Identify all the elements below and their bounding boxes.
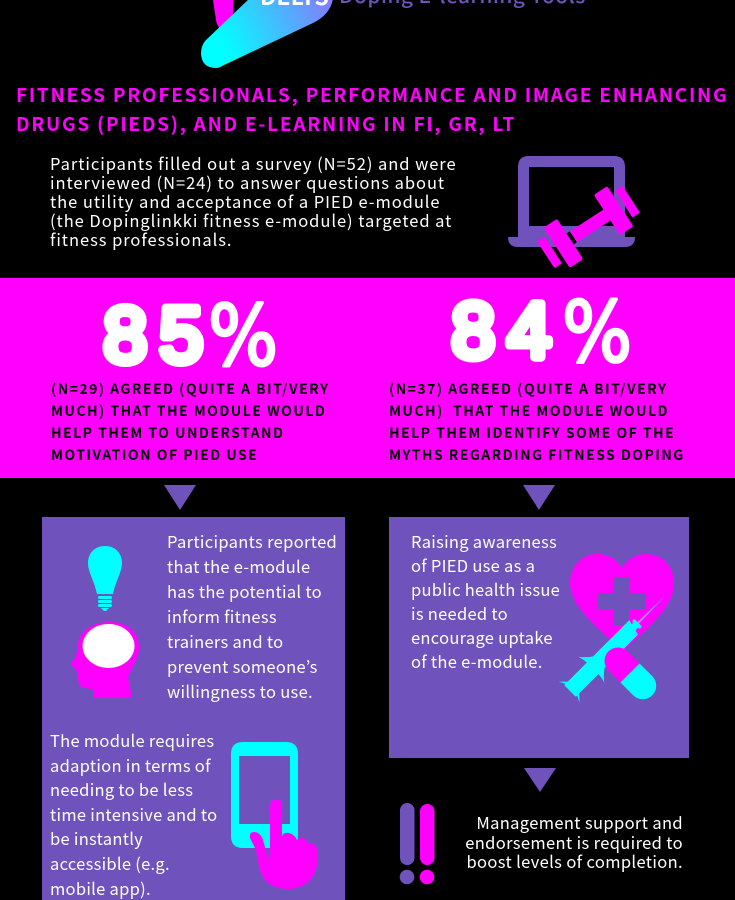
logo wordmark — [260, 0, 586, 12]
text: adaption: needing to be less — [50, 777, 193, 801]
title — [16, 81, 728, 137]
title: DRUGS (PIEDS), AND E-LEARNING IN FI, GR, LT — [16, 110, 516, 137]
text: adaption: mobile app). — [50, 876, 151, 900]
intro text: (the Dopinglinkki fitness e-module) targeted at — [50, 208, 452, 232]
intro text: fitness professionals. — [50, 227, 232, 251]
text: raising awareness: encourage uptake — [411, 625, 553, 649]
text: management support: boost levels of completion. — [466, 849, 683, 873]
panel: left findings — [42, 517, 345, 900]
caption: 85%: (N=29) AGREED (QUITE A BIT/VERY — [51, 379, 330, 399]
text: inform trainers: trainers and to — [167, 629, 283, 653]
text: inform trainers: prevent someone’s — [167, 654, 318, 678]
caption: 84%: MYTHS REGARDING FITNESS DOPING — [389, 445, 685, 465]
text: adaption: time intensive and to — [50, 802, 217, 826]
caption: 84%: MUCH) THAT THE MODULE WOULD — [389, 401, 669, 421]
text: inform trainers: inform fitness — [167, 604, 277, 628]
caption: 84%: HELP THEM IDENTIFY SOME OF THE — [389, 423, 675, 443]
stat: 85%: 85 — [104, 290, 203, 378]
text: adaption: accessible (e.g. — [50, 851, 170, 875]
caption: 85%: MUCH) THAT THE MODULE WOULD — [51, 401, 326, 421]
text: adaption — [50, 728, 217, 900]
caption: 84%: (N=37) AGREED (QUITE A BIT/VERY — [389, 379, 668, 399]
intro text: the utility and acceptance of a PIED e-module — [50, 189, 441, 213]
text: inform trainers: Participants reported — [167, 529, 337, 553]
stat: 84%: 84 — [452, 286, 551, 374]
text: raising awareness: of the e-module. — [411, 649, 543, 673]
intro text — [50, 151, 457, 251]
text: inform trainers: willingness to use. — [167, 679, 313, 703]
caption: 84% — [389, 379, 685, 465]
panel: statistics band — [0, 278, 735, 478]
stat: 84%: % — [562, 284, 632, 382]
text: raising awareness: is needed to — [411, 601, 508, 625]
text: adaption: adaption in terms of — [50, 753, 211, 777]
title: FITNESS PROFESSIONALS, PERFORMANCE AND IMAGE ENHANCING — [16, 81, 728, 108]
text: raising awareness: of PIED use as a — [411, 553, 535, 577]
text: raising awareness — [411, 529, 560, 673]
intro text: interviewed (N=24) to answer questions about — [50, 170, 445, 194]
text: raising awareness: public health issue — [411, 577, 560, 601]
stat: 85%: % — [208, 287, 278, 385]
text: adaption: The module requires — [50, 728, 214, 752]
text: adaption: be instantly — [50, 826, 143, 850]
text: management support: endorsement is required to — [465, 830, 683, 854]
caption: 85%: MOTIVATION OF PIED USE — [51, 445, 258, 465]
text: inform trainers: has the potential to — [167, 579, 322, 603]
text: management support: Management support and — [476, 810, 683, 834]
text: raising awareness: Raising awareness — [411, 529, 557, 553]
intro text: Participants filled out a survey (N=52) and were — [50, 151, 457, 175]
caption: 85%: HELP THEM TO UNDERSTAND — [51, 423, 284, 443]
text: inform trainers — [167, 529, 337, 703]
text: inform trainers: that the e-module — [167, 554, 310, 578]
panel: right findings — [389, 517, 689, 758]
caption: 85% — [51, 379, 330, 465]
text: management support — [465, 810, 683, 873]
